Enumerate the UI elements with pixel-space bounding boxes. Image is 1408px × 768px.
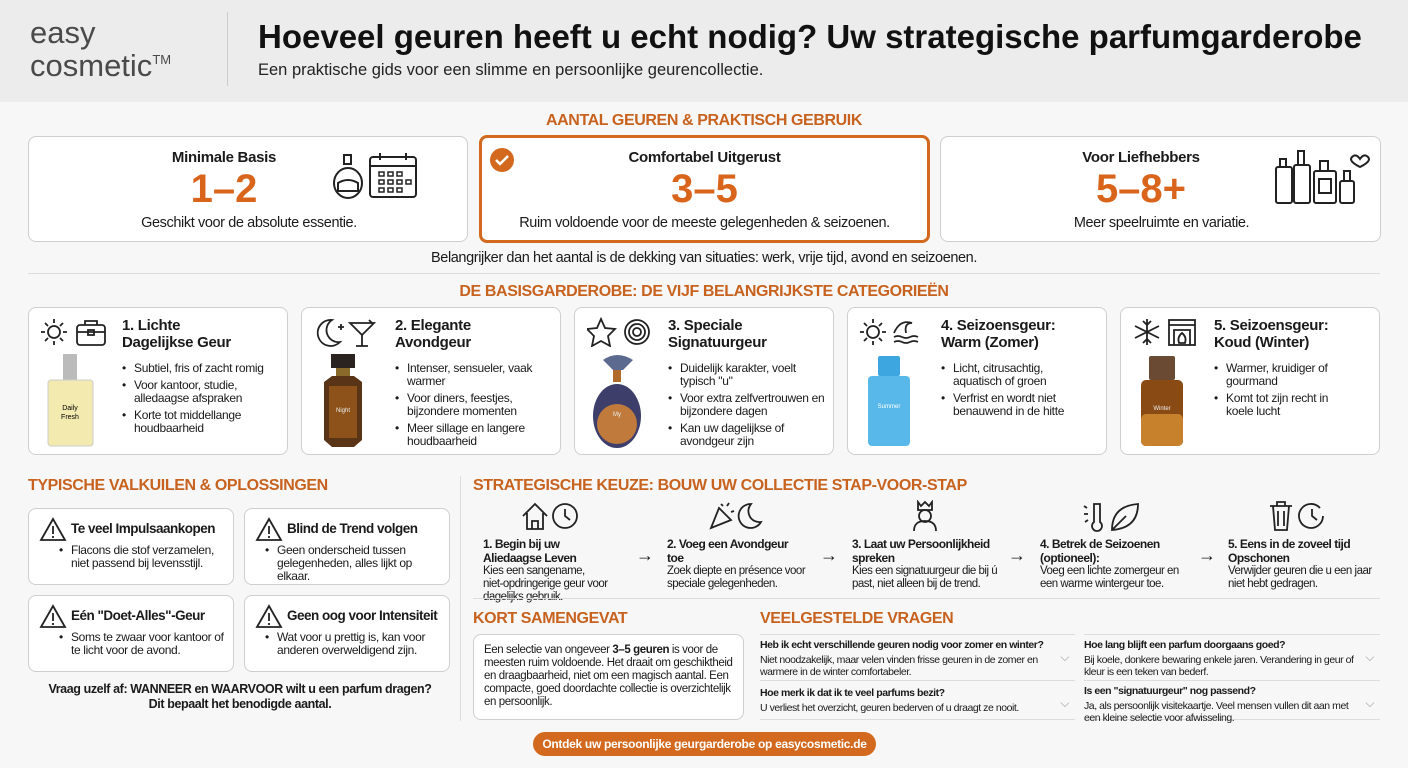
panel: cat 4: Warm (Zomer) (941, 334, 1039, 351)
faq 4: ⌵ (1365, 696, 1374, 710)
panel: cat 1 (28, 307, 288, 455)
panel: cat 3: 3. Speciale (668, 317, 742, 334)
icon: sun wave (860, 319, 918, 345)
panel: voor liefhebbers (940, 136, 1381, 242)
step 3: 3. Laat uw Persoonlijkheid (852, 537, 990, 551)
faq 2: ⌵ (1060, 696, 1069, 710)
panel: cat 5: 5. Seizoensgeur: (1214, 317, 1328, 334)
faq 1: ⌵ (1060, 650, 1069, 664)
panel: pitfall 1: Flacons die stof verzamelen, niet passend bij levensstijl. (71, 543, 214, 570)
panel: cat 3: Voor extra zelfvertrouwen en bijzondere dagen (680, 391, 824, 418)
panel: cat 3: Kan uw dagelijkse of avondgeur zijn (680, 421, 784, 448)
icon: trash clock (1270, 501, 1324, 531)
faq 3 (1084, 634, 1380, 679)
panel: cat 2: Intenser, sensueler, vaak warmer (407, 361, 532, 388)
panel: cat 5: Warmer, kruidiger of gourmand (1226, 361, 1328, 388)
faq 1: Heb ik echt verschillende geuren nodig voor zomer en winter? (760, 639, 1043, 651)
icon: round bottle: My (613, 412, 621, 418)
step 5: Verwijder geuren die u een jaar niet hebt gedragen. (1228, 565, 1372, 590)
icon: blue bottle (868, 356, 910, 446)
panel: cat 3: Duidelijk karakter, voelt typisch "u" (680, 361, 796, 388)
icon: warning (256, 604, 282, 628)
step 2: 2. Voeg een Avondgeur (667, 537, 788, 551)
subtitle: Een praktische gids voor een slimme en persoonlijke geurencollectie. (258, 61, 763, 79)
icon: thermometer leaf (1084, 503, 1139, 532)
panel: pitfall 2: Blind de Trend volgen (287, 521, 418, 536)
faq 2: Hoe merk ik dat ik te veel parfums bezit? (760, 687, 945, 699)
step 4 (1040, 503, 1179, 590)
panel: cat 1: Subtiel, fris of zacht romig (134, 361, 264, 375)
icon: dark bottle: Night (336, 408, 350, 414)
step 1: 1. Begin bij uw (483, 537, 560, 551)
panel: minimale basis: Geschikt voor de absolute essentie. (141, 215, 357, 231)
step 3: spreken (852, 550, 895, 564)
panel: summary (473, 634, 744, 720)
icon: dark bottle (324, 354, 362, 447)
icon: party moon (709, 502, 763, 530)
heading: kort samengevat: KORT SAMENGEVAT (473, 610, 627, 627)
panel: cat 4: Licht, citrusachtig, aquatisch of groen (953, 361, 1046, 388)
button: cta: Ontdek uw persoonlijke geurgarderobe op easycosmetic.de (542, 737, 867, 751)
icon: snowflake fireplace (1134, 319, 1196, 346)
logo: easy (30, 15, 95, 50)
title: Hoeveel geuren heeft u echt nodig? Uw strategische parfumgarderobe (258, 18, 1362, 55)
step 1: Kies een sangename, (483, 565, 585, 577)
step 3 (852, 500, 997, 590)
panel: minimale basis: 1–2 (191, 167, 257, 211)
heading: veelgestelde vragen: VEELGESTELDE VRAGEN (760, 610, 953, 627)
panel: summary: Een selectie van ongeveer 3–5 geuren is voor de meesten ruim voldoende. Het draait om geschiktheid en draagbaarheid, niet om een magisch aantal. Een compacte, goed doordachte collectie is overzichtelijk en persoonlijk. (484, 644, 732, 708)
faq 4 (1084, 680, 1380, 720)
faq 3: Hoe lang blijft een parfum doorgaans goed? (1084, 639, 1285, 651)
panel: minimale basis: Minimale Basis (172, 149, 276, 166)
step 5 (1228, 501, 1372, 590)
panel: pitfall 4: Wat voor u prettig is, kan voor anderen overweldigend zijn. (277, 630, 425, 657)
heading: basisgarderobe: DE BASISGARDEROBE: DE VIJF BELANGRIJKSTE CATEGORIEËN (459, 283, 949, 300)
panel: pitfall 4 (244, 595, 450, 672)
panel: cat 3 (574, 307, 834, 455)
panel: cat 4: Verfrist en wordt niet benauwend in de hitte (953, 391, 1064, 418)
text: vraag uzelf af: Vraag uzelf af: WANNEER en WAARVOOR wilt u een parfum dragen? (48, 682, 432, 696)
panel: pitfall 1 (28, 508, 234, 585)
step 5: Opschonen (1228, 550, 1290, 564)
panel: voor liefhebbers: 5–8+ (1096, 167, 1186, 211)
step 4: (optioneel): (1040, 550, 1099, 564)
faq 3: ⌵ (1365, 650, 1374, 664)
panel: comfortabel uitgerust: Ruim voldoende voor de meeste gelegenheden & seizoenen. (519, 215, 890, 231)
icon: bottle calendar (333, 153, 417, 199)
logo: cosmeticTM (30, 48, 171, 83)
panel: pitfall 3: Eén "Doet-Alles"-Geur (71, 608, 205, 623)
icon: check (490, 148, 514, 172)
panel: minimale basis (28, 136, 468, 242)
text: vraag uzelf af (48, 682, 432, 711)
step 1: niet-opdringerige geur voor dagelijks gebruik. (483, 578, 608, 603)
arrow: → (1008, 545, 1026, 565)
panel: comfortabel uitgerust (479, 135, 930, 243)
panel: pitfall 1: Te veel Impulsaankopen (71, 521, 215, 536)
panel: comfortabel uitgerust: 3–5 (671, 167, 738, 211)
icon: brown bottle (1141, 356, 1183, 446)
panel: pitfall 2 (244, 508, 450, 585)
step 4: Voeg een lichte zomergeur en een warme wintergeur toe. (1040, 565, 1179, 590)
faq 4: Is een "signatuurgeur" nog passend? (1084, 685, 1256, 697)
panel: pitfall 2: Geen onderscheid tussen gelegenheden, alles lijkt op elkaar. (277, 543, 412, 583)
icon: warning (40, 604, 66, 628)
button: cta (533, 732, 876, 756)
icon: warning (256, 517, 282, 541)
arrow: → (1198, 545, 1216, 565)
panel: cat 2: Meer sillage en langere houdbaarheid (407, 421, 525, 448)
step 5: 5. Eens in de zoveel tijd (1228, 537, 1350, 551)
heading: strategische keuze: STRATEGISCHE KEUZE: BOUW UW COLLECTIE STAP-VOOR-STAP (473, 477, 967, 494)
heading: valkuilen: TYPISCHE VALKUILEN & OPLOSSINGEN (28, 477, 328, 494)
panel: cat 4 (847, 307, 1107, 455)
panel: cat 5 (1120, 307, 1380, 455)
icon: blue bottle: Summer (878, 404, 900, 410)
text: dekking: Belangrijker dan het aantal is de dekking van situaties: werk, vrije tijd, avond en seizoenen. (431, 250, 977, 266)
icon: bottle yellow: Fresh (61, 414, 79, 421)
panel: cat 2: Voor diners, feestjes, bijzondere momenten (407, 391, 517, 418)
panel: cat 1: Dagelijkse Geur (122, 334, 231, 351)
faq 1: Niet noodzakelijk, maar velen vinden frisse geuren in de zomer en warmere in de winter comfortabeler. (760, 654, 1038, 678)
icon: star fingerprint (587, 317, 650, 347)
faq 2 (760, 680, 1075, 720)
icon: moon cocktail (316, 319, 376, 347)
icon: person crown (913, 500, 937, 531)
arrow: → (820, 545, 838, 565)
icon: house clock (522, 502, 578, 530)
icon: brown bottle: Winter (1153, 406, 1171, 412)
icon: warning (40, 517, 66, 541)
icon: round bottle (593, 355, 641, 448)
step 4: 4. Betrek de Seizoenen (1040, 537, 1160, 551)
panel: cat 3: Signatuurgeur (668, 334, 767, 351)
panel: cat 2 (301, 307, 561, 455)
icon: sun briefcase (41, 319, 106, 346)
panel: pitfall 3: Soms te zwaar voor kantoor of te licht voor de avond. (71, 630, 224, 657)
panel: cat 4: 4. Seizoensgeur: (941, 317, 1055, 334)
panel: cat 1: Korte tot middellange houdbaarheid (134, 408, 241, 435)
panel: comfortabel uitgerust: Comfortabel Uitgerust (628, 149, 781, 166)
icon: bottles heart (1275, 150, 1370, 204)
panel: cat 2: Avondgeur (395, 334, 471, 351)
panel: cat 1: Voor kantoor, studie, alledaagse afspraken (134, 378, 242, 405)
step 2: Zoek diepte en présence voor speciale gelegenheden. (667, 565, 805, 590)
step 2: toe (667, 550, 684, 564)
step 1 (483, 502, 608, 603)
panel: cat 1: 1. Lichte (122, 317, 180, 334)
step 1: Aliedaagse Leven (483, 550, 576, 564)
faq 3: Bij koele, donkere bewaring enkele jaren. Verandering in geur of kleur is een teken van bederf. (1084, 654, 1353, 678)
faq 2: U verliest het overzicht, geuren bederven of u draagt ze nooit. (760, 702, 1019, 714)
panel: voor liefhebbers: Meer speelruimte en variatie. (1074, 215, 1249, 231)
step 2 (667, 502, 806, 590)
icon: bottle yellow (48, 354, 94, 446)
header band (0, 0, 1408, 102)
faq 1 (760, 634, 1075, 679)
faq 4: Ja, als persoonlijk visitekaartje. Veel mensen vullen dit aan met een kleine selectie voor afwisseling. (1084, 700, 1348, 724)
icon: bottle yellow: Daily (62, 405, 78, 412)
logo (30, 15, 171, 83)
panel: voor liefhebbers: Voor Liefhebbers (1082, 149, 1200, 166)
panel: cat 2: 2. Elegante (395, 317, 471, 334)
arrow: → (636, 545, 654, 565)
panel: cat 5: Komt tot zijn recht in koele lucht (1226, 391, 1328, 418)
panel: cat 5: Koud (Winter) (1214, 334, 1309, 351)
panel: pitfall 4: Geen oog voor Intensiteit (287, 608, 437, 623)
step 3: Kies een signatuurgeur die bij ú past, niet alleen bij de trend. (852, 565, 997, 590)
panel: pitfall 3 (28, 595, 234, 672)
heading: aantal geuren: AANTAL GEUREN & PRAKTISCH GEBRUIK (546, 112, 862, 129)
text: vraag uzelf af: Dit bepaalt het benodigde aantal. (149, 697, 331, 711)
